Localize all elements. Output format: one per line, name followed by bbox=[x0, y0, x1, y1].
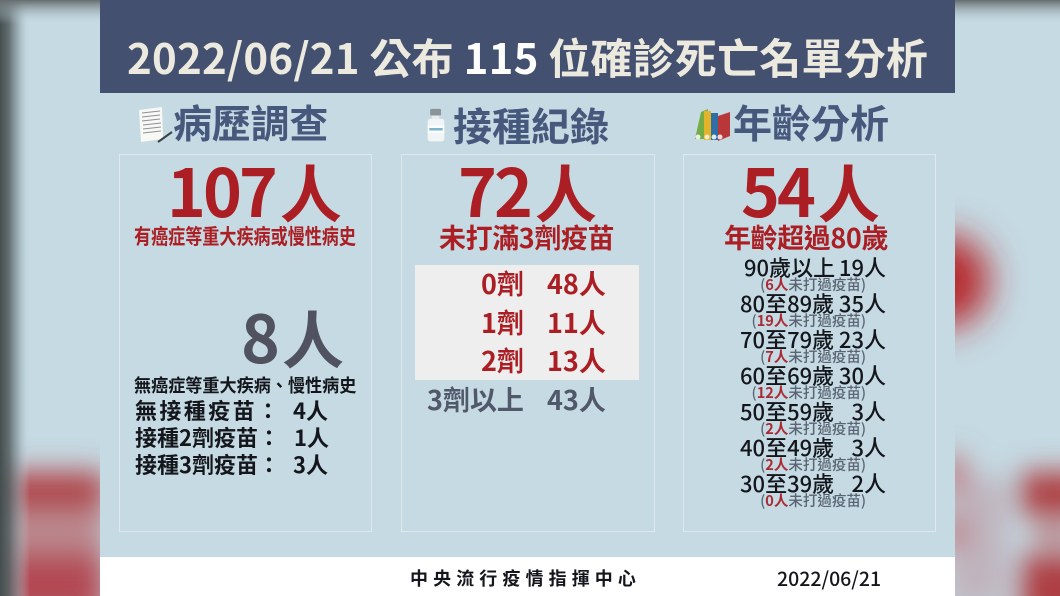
count: 3人 bbox=[851, 395, 886, 427]
value: 48人 bbox=[547, 263, 606, 302]
panel: age analysis bbox=[683, 154, 936, 532]
unvaccinated 60-69: (12人未打過疫苗) bbox=[752, 382, 866, 403]
panel: medical history bbox=[119, 154, 372, 532]
header bar bbox=[100, 0, 955, 93]
unvaccinated 70-79: (7人未打過疫苗) bbox=[760, 346, 866, 367]
heading: medical history: 病歷調查 bbox=[173, 94, 328, 150]
caption: 107: 有癌症等重大疾病或慢性病史 bbox=[134, 221, 356, 251]
value: 43人 bbox=[547, 379, 606, 418]
row: 0 doses: 0劑 bbox=[481, 263, 524, 302]
footer bar bbox=[100, 557, 955, 596]
icon: document and pen bbox=[139, 107, 172, 143]
age list bbox=[740, 251, 886, 511]
title: 2022/06/21 公布 115 位確診死亡名單分析 bbox=[127, 26, 928, 87]
heading: vaccination record: 接種紀錄 bbox=[453, 97, 609, 153]
unvaccinated 50-59: (2人未打過疫苗) bbox=[760, 418, 866, 439]
row: 3 or more doses: 3劑以上 bbox=[427, 379, 524, 418]
age row 30-39: 30至39歲 bbox=[740, 467, 834, 499]
highlight: under three doses bbox=[415, 265, 639, 380]
age row 70-79: 70至79歲 bbox=[740, 323, 834, 355]
panel: vaccination record bbox=[401, 154, 655, 532]
age row 50-59: 50至59歲 bbox=[740, 395, 834, 427]
count: 30人 bbox=[839, 359, 886, 391]
count: 19人 bbox=[839, 251, 886, 283]
count: 3人 bbox=[851, 431, 886, 463]
age row 90+: 90歲以上 bbox=[744, 251, 835, 283]
icon: vaccine bottle bbox=[428, 108, 444, 142]
unvaccinated 90+: (6人未打過疫苗) bbox=[760, 274, 866, 295]
value: 3人 bbox=[293, 448, 328, 480]
value: 11人 bbox=[547, 302, 606, 341]
stat: 72: 72人 bbox=[458, 141, 597, 237]
age row 80-89: 80至89歲 bbox=[740, 287, 834, 319]
footer organisation: 中央流行疫情指揮中心 bbox=[410, 565, 641, 591]
caption: 54: 年齡超過80歲 bbox=[724, 217, 888, 256]
count: 23人 bbox=[839, 323, 886, 355]
unvaccinated 40-49: (2人未打過疫苗) bbox=[760, 454, 866, 475]
unvaccinated 80-89: (19人未打過疫苗) bbox=[752, 310, 866, 331]
stat: 54: 54人 bbox=[741, 141, 880, 237]
list: 2 doses: 接種2劑疫苗： bbox=[135, 421, 280, 453]
list: 3 doses: 接種3劑疫苗： bbox=[135, 448, 280, 480]
value: 1人 bbox=[294, 421, 329, 453]
age row 60-69: 60至69歲 bbox=[740, 359, 834, 391]
list: no vaccine: 無接種疫苗： bbox=[135, 394, 281, 426]
value: 4人 bbox=[293, 394, 328, 426]
caption: 72: 未打滿3劑疫苗 bbox=[439, 217, 614, 256]
unvaccinated 30-39: (0人未打過疫苗) bbox=[760, 490, 866, 511]
count: 2人 bbox=[851, 467, 886, 499]
icon: books bbox=[695, 109, 730, 141]
count: 35人 bbox=[839, 287, 886, 319]
heading: age analysis: 年齡分析 bbox=[733, 94, 889, 150]
value: 13人 bbox=[547, 340, 606, 379]
stat: 8: 8人 bbox=[241, 287, 344, 383]
stat: 107: 107人 bbox=[167, 141, 342, 237]
footer date: 2022/06/21 bbox=[777, 563, 881, 592]
age row 40-49: 40至49歲 bbox=[740, 431, 834, 463]
row: 2 doses: 2劑 bbox=[481, 340, 524, 379]
panel: main background bbox=[100, 0, 955, 558]
caption: 8: 無癌症等重大疾病、慢性病史 bbox=[134, 372, 356, 398]
row: 1 dose: 1劑 bbox=[481, 302, 524, 341]
